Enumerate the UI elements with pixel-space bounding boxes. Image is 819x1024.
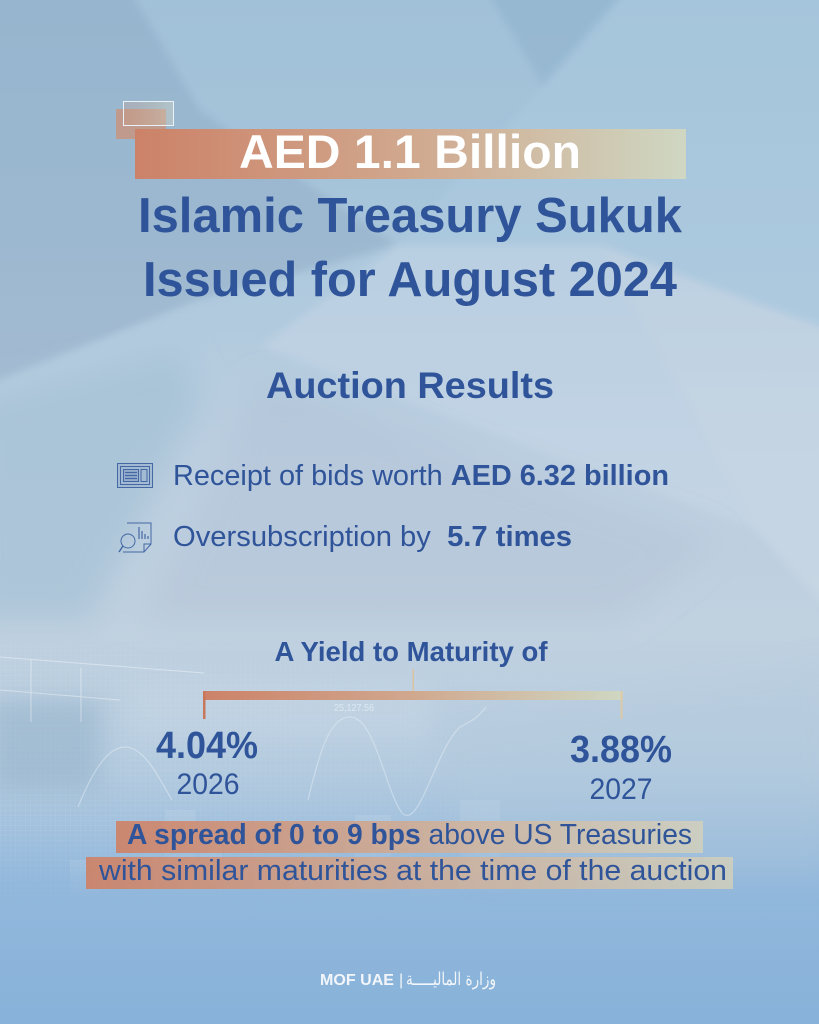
- yield 2026: [156, 725, 258, 801]
- footer logo text: MOF UAE: [320, 972, 394, 989]
- title highlight bar: [135, 129, 686, 179]
- icon: magnified report: [119, 523, 151, 552]
- title: Issued for August 2024: [143, 253, 677, 307]
- spread callout: with similar maturities at the time of the auction: [98, 855, 727, 887]
- oversubscription text: Oversubscription by 5.7 times: [173, 521, 572, 553]
- yield heading: A Yield to Maturity of: [274, 636, 548, 667]
- title: [138, 125, 683, 307]
- icon: banknote: [118, 464, 152, 488]
- yield 2027: 2027: [590, 773, 652, 806]
- oversubscription row: [119, 521, 572, 553]
- heading: auction results: Auction Results: [266, 365, 554, 406]
- background financial chart: [0, 656, 500, 886]
- bid receipt text: Receipt of bids worth AED 6.32 billion: [173, 460, 669, 492]
- yield 2027: [570, 729, 672, 806]
- footer logo text: |: [399, 972, 403, 989]
- yield 2027: 3.88%: [570, 729, 672, 771]
- background financial chart: 25,127.56: [334, 703, 374, 714]
- yield bracket connector: [203, 669, 623, 719]
- spread callout: A spread of 0 to 9 bps above US Treasuries: [127, 819, 692, 851]
- decorative corner squares: [116, 102, 174, 139]
- title: AED 1.1 Billion: [239, 125, 581, 178]
- yield 2026: 4.04%: [156, 725, 258, 767]
- spread callout: [86, 819, 733, 889]
- title: Islamic Treasury Sukuk: [138, 189, 683, 243]
- footer logo text: [320, 969, 496, 990]
- bid receipt row: [118, 460, 669, 492]
- footer logo text: وزارة الماليـــــة: [406, 969, 496, 990]
- yield 2026: 2026: [176, 768, 240, 801]
